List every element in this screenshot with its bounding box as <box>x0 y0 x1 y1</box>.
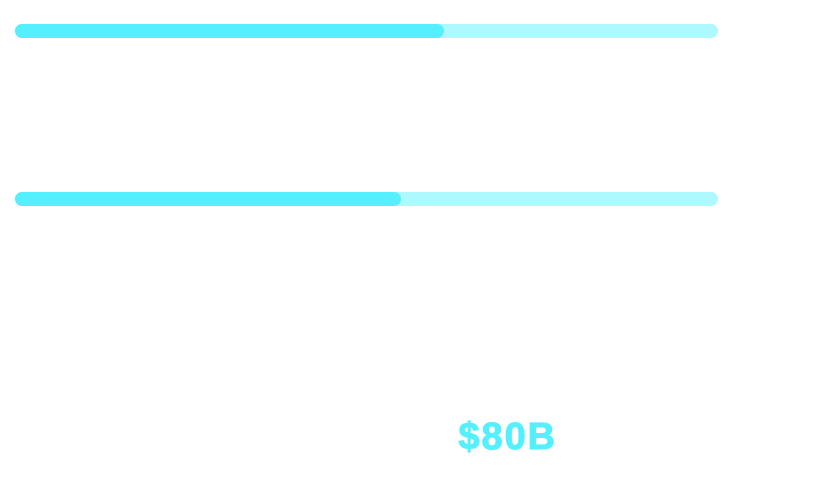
progress bar fill: second <box>15 192 401 206</box>
progress bar: second <box>15 192 718 206</box>
statistic: $80B: $80B <box>458 416 557 458</box>
progress bar: first <box>15 24 718 38</box>
progress bar fill: first <box>15 24 444 38</box>
